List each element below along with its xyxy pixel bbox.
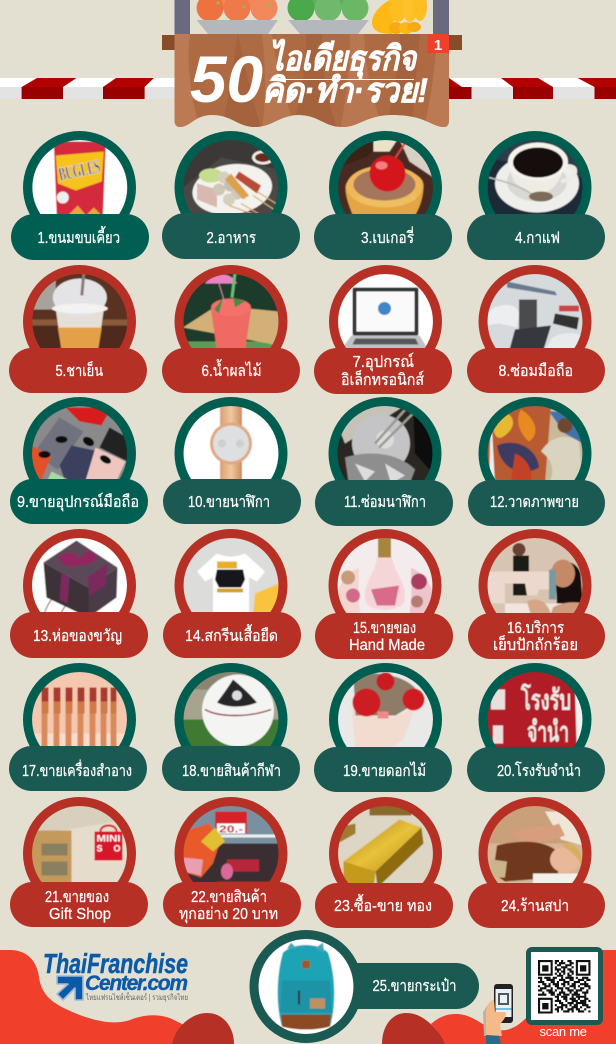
item 18 sports goods (162, 663, 300, 791)
item 19 flowers (314, 663, 452, 792)
photo: rose bouquet (338, 672, 433, 747)
label text (349, 620, 425, 654)
item 11 watch repair (315, 397, 453, 526)
photo: phone cases (32, 406, 127, 479)
photo: cherry tart (338, 140, 433, 214)
photo: watch mechanism (338, 406, 432, 480)
page number tag: 1 (434, 37, 442, 54)
QR pattern (538, 960, 590, 1012)
scan me caption: scan me (540, 1024, 587, 1039)
photo: phone repair bench (488, 274, 582, 348)
stall posts (174, 0, 449, 35)
label pill (9, 746, 147, 791)
label text (341, 352, 424, 389)
photo: Miniso store: SO (96, 844, 120, 854)
photo: lipsticks (32, 672, 127, 746)
awning stripe band (0, 78, 616, 99)
label pill (467, 214, 605, 260)
label text: 14.สกรีนเสื้อยืด (185, 624, 278, 645)
label pill (467, 348, 605, 393)
label pill (162, 746, 300, 791)
label pill (163, 479, 301, 524)
logo: ThaiFranchise Center: ThaiFranchise (43, 948, 188, 979)
photo: skewers on plate (184, 140, 278, 213)
footer background blobs (0, 950, 616, 1044)
label text: 19.ขายดอกไม้ (343, 761, 426, 780)
photo: chip bag: BUGLES (57, 156, 102, 186)
item 14 t-shirt screen (163, 529, 301, 658)
item 16 sewing (468, 529, 605, 659)
item 23 gold (315, 797, 453, 928)
label text: Hand Made (349, 637, 425, 654)
label text: 15.ขายของ (353, 620, 416, 637)
label pill (467, 747, 605, 792)
label text: 21.ขายของ (45, 889, 109, 906)
logo: ThaiFranchise Center (43, 948, 188, 1002)
photo: gift box (32, 538, 127, 612)
item 25 bags (250, 930, 479, 1043)
label pill (468, 480, 605, 526)
item 9 phone accessories (10, 397, 148, 524)
label text (45, 889, 111, 923)
photo: gold bar (338, 806, 434, 902)
label text: 1.ขนมขบเคี้ยว (38, 226, 120, 247)
label pill (314, 747, 452, 792)
label text: Gift Shop (49, 906, 111, 923)
cloth banner (174, 34, 449, 127)
label text: 2.อาหาร (206, 230, 256, 247)
photo: Miniso store (32, 806, 128, 902)
label pill (10, 612, 148, 658)
item 6 fruit juice (162, 265, 300, 393)
icon: hand holding phone (483, 984, 513, 1044)
label text: 24.ร้านสปา (501, 897, 569, 915)
label text: 17.ขายเครื่องสำอาง (22, 759, 132, 780)
label pill (314, 348, 452, 394)
label pill (314, 214, 452, 260)
label pill (468, 883, 605, 928)
label text: 4.กาแฟ (515, 230, 560, 247)
item 8 phone repair (467, 265, 605, 393)
item 1 snacks (11, 131, 149, 260)
label text: 7.อุปกรณ์ (352, 352, 414, 372)
item 20 pawn shop (467, 663, 605, 792)
photo: coffee cup (488, 140, 582, 214)
photo: backpack (258, 938, 354, 1034)
label pill (315, 480, 453, 526)
label pill (163, 882, 301, 927)
label pill (162, 213, 300, 259)
label text: 22.ขายสินค้า (191, 888, 267, 906)
photo: artist painting (488, 406, 582, 480)
label pill (330, 963, 479, 1009)
photo: flower bulbs (338, 538, 432, 613)
item 12 painting (468, 397, 605, 526)
page number tag (428, 34, 449, 54)
label text: 12.วาดภาพขาย (490, 494, 579, 511)
shelf bar (162, 35, 462, 50)
photo: watermelon smoothie (184, 274, 278, 348)
label text: 23.ซื้อ-ขาย ทอง (334, 894, 432, 915)
title divider (271, 79, 414, 80)
item 22 20 baht shop (163, 797, 301, 927)
label pill (9, 348, 147, 393)
item 3 bakery (314, 131, 452, 260)
label text: 13.ห่อของขวัญ (33, 628, 122, 645)
label pill (10, 479, 148, 524)
photo: 20 baht store: 20.- (219, 824, 243, 836)
item 24 spa (468, 797, 605, 928)
photo: massage (487, 806, 583, 902)
title line 1: ไอเดียธุรกิจ (269, 38, 418, 80)
label pill (163, 612, 301, 658)
label text: 10.ขายนาฬิกา (188, 494, 270, 511)
item 17 cosmetics (9, 663, 147, 791)
item 13 gift wrap (10, 529, 148, 658)
label text: 6.น้ำผลไม้ (202, 359, 262, 380)
label text: อิเล็กทรอนิกส์ (341, 369, 424, 389)
title line 2: คิด·ทำ·รวย! (262, 72, 428, 110)
label pill (162, 348, 300, 393)
label text: 11.ซ่อมนาฬิกา (344, 494, 426, 511)
label text (493, 620, 578, 654)
photo: pawn shop sign: โรงรับ (520, 682, 571, 716)
photo: football (184, 672, 278, 746)
item 10 watches (163, 397, 301, 524)
photo: rose gold watch (184, 406, 278, 479)
label text: 8.ซ่อมมือถือ (498, 362, 573, 380)
label pill (315, 613, 453, 659)
photo: t-shirt (184, 538, 278, 612)
logo: ThaiFranchise Center: Center.com (85, 972, 188, 995)
photo: laptop (338, 274, 433, 348)
label text: 25.ขายกระเป๋า (372, 977, 456, 995)
label text: 20.โรงรับจำนำ (497, 761, 581, 780)
label text: 5.ชาเย็น (56, 360, 103, 380)
QR code (526, 947, 603, 1025)
label text (179, 888, 278, 924)
item 7 electronics (314, 265, 452, 394)
icon: bananas (372, 0, 427, 34)
item 4 coffee (467, 131, 605, 260)
photo: thai iced tea (32, 274, 128, 348)
label text: 9.ขายอุปกรณ์มือถือ (17, 492, 139, 512)
label text: เย็บปักถักร้อย (493, 634, 578, 654)
label pill (315, 883, 453, 928)
label text: ทุกอย่าง 20 บาท (179, 906, 278, 924)
icon: green fruit bowl (288, 0, 369, 34)
item 15 handmade (315, 529, 453, 659)
label pill (468, 613, 605, 659)
icon: logo arrow (57, 976, 83, 1000)
photo: Miniso store: MINI (96, 834, 120, 844)
photo: pawn shop sign: จำนำ (527, 716, 569, 748)
photo: pawn shop sign (487, 672, 583, 768)
icon: orange fruit bowl (196, 0, 278, 34)
market stall title sign (162, 0, 462, 130)
label text: 3.เบเกอรี่ (361, 226, 414, 247)
label pill (10, 882, 148, 927)
logo: ThaiFranchise Center: ไทยแฟรนไชส์เซ็นเตอร์ | รวมธุรกิจไทย (85, 992, 188, 1002)
title number 50: 50 (190, 42, 263, 116)
label pill (11, 214, 149, 260)
item 5 iced tea (9, 265, 147, 393)
photo: sewing machine (488, 538, 582, 613)
item 2 food (162, 131, 300, 259)
item 21 gift shop (10, 797, 148, 927)
label text: 18.ขายสินค้ากีฬา (182, 762, 281, 780)
label text: 16.บริการ (507, 620, 564, 637)
